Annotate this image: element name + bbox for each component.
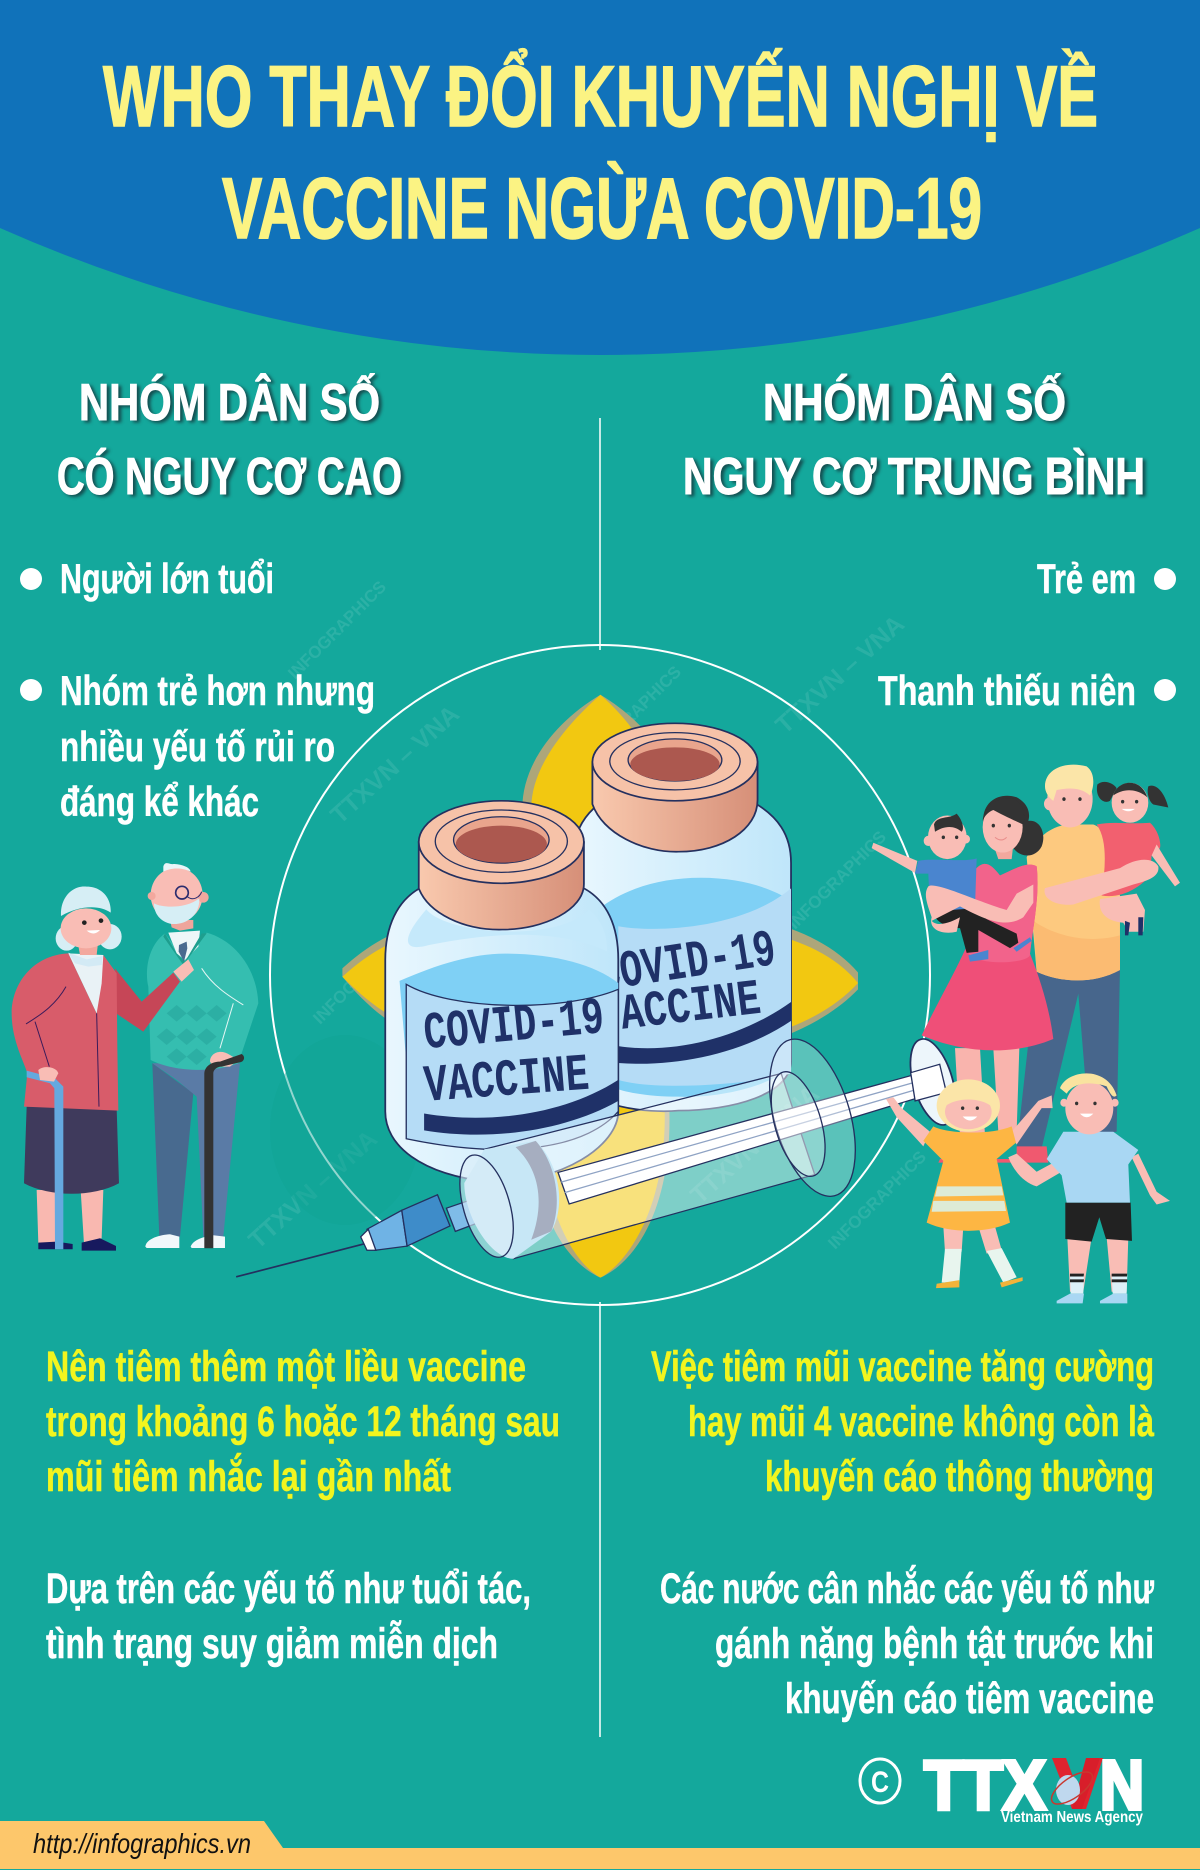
- title: [103, 49, 1098, 257]
- baby held by mother: [872, 814, 1032, 962]
- front vial: [385, 801, 618, 1182]
- plunger disc: [902, 1034, 964, 1129]
- recommendation: high risk: mũi tiêm nhắc lại gần nhất: [46, 1452, 451, 1501]
- needle hub: [361, 1195, 478, 1250]
- father's arm: [1045, 860, 1158, 905]
- back vial: [574, 723, 791, 1111]
- title banner: [0, 0, 1200, 355]
- illustration: children: [886, 1073, 1170, 1303]
- logo: TTXVN: Vietnam News Agency: [1001, 1809, 1143, 1826]
- source url: http://infographics.vn: [33, 1828, 251, 1859]
- heading: high risk group: CÓ NGUY CƠ CAO: [57, 448, 402, 506]
- list: high risk groups: Nhóm trẻ hơn nhưng: [60, 667, 375, 714]
- old man's cane: [204, 1054, 244, 1248]
- central circle: [270, 645, 930, 1305]
- list: high risk groups: Người lớn tuổi: [60, 555, 274, 602]
- old woman's hand: [38, 1067, 58, 1082]
- list: high risk groups: nhiều yếu tố rủi ro: [60, 723, 335, 770]
- heading: high risk group: NHÓM DÂN SỐ: [79, 373, 380, 432]
- watermarks: [243, 577, 930, 1254]
- recommendation: high risk: [46, 1343, 560, 1501]
- list: medium risk groups: [878, 555, 1176, 714]
- little girl: [886, 1079, 1053, 1288]
- little boy: [1008, 1073, 1170, 1303]
- watermarks: INFOGRAPHICS: [284, 577, 390, 683]
- illustration: syringe: [236, 1030, 964, 1277]
- logo: TTXVN: N: [1100, 1746, 1144, 1824]
- logo: TTXVN: C: [871, 1766, 889, 1799]
- logo: TTXVN: [860, 1746, 1144, 1826]
- plunger rod: [558, 1070, 940, 1204]
- old woman's cane: [27, 1071, 63, 1249]
- note: high risk: tình trạng suy giảm miễn dịch: [46, 1619, 498, 1668]
- footer band: [0, 1821, 1200, 1869]
- front vial: COVID-19: [421, 990, 607, 1065]
- heading: medium risk group: NHÓM DÂN SỐ: [763, 373, 1066, 432]
- mother: [922, 796, 1053, 1135]
- recommendation: medium risk: [651, 1343, 1155, 1501]
- father: [938, 765, 1120, 1163]
- list: medium risk groups: Trẻ em: [1037, 555, 1136, 602]
- illustration: family: [872, 765, 1180, 1163]
- watermarks: TTXVN – VNA: [685, 1080, 825, 1209]
- watermarks: TTXVN – VNA: [770, 610, 910, 739]
- girl held by father: [1097, 782, 1180, 935]
- mother's arm: [926, 885, 1033, 933]
- logo: TTXVN: TTX: [924, 1746, 1046, 1824]
- barrel: [484, 1074, 815, 1259]
- barrel left section: [464, 1141, 559, 1259]
- list: high risk groups: đáng kể khác: [60, 778, 259, 825]
- central divider: [599, 418, 601, 1737]
- recommendation: high risk: Nên tiêm thêm một liều vaccine: [46, 1343, 526, 1391]
- back vial: COVID-19: [593, 922, 780, 1007]
- recommendation: high risk: trong khoảng 6 hoặc 12 tháng sau: [46, 1398, 560, 1446]
- watermarks: INFOGRAPHICS: [824, 1147, 930, 1253]
- back vial: VACCINE: [594, 971, 764, 1047]
- soft background blob: [270, 1035, 420, 1225]
- note: medium risk: [660, 1564, 1155, 1723]
- old woman: [12, 887, 194, 1251]
- note: high risk: Dựa trên các yếu tố như tuổi tác,: [46, 1565, 531, 1613]
- illustration: elderly couple: [12, 863, 258, 1251]
- finger flange: [754, 1030, 871, 1205]
- heading: medium risk group: [683, 373, 1145, 506]
- illustration: vaccine vials: [342, 695, 858, 1278]
- heading: high risk group: [57, 373, 402, 506]
- watermarks: TTXVN – VNA: [243, 1125, 383, 1254]
- watermarks: TTXVN – VNA: [325, 700, 465, 829]
- needle: [236, 1244, 364, 1277]
- old man: [145, 863, 258, 1248]
- watermarks: INFOGRAPHICS: [784, 827, 890, 933]
- flower petals: [342, 695, 858, 1278]
- watermarks: INFOGRAPHICS: [309, 922, 415, 1028]
- list: high risk groups: [20, 555, 375, 825]
- note: high risk: [46, 1565, 531, 1668]
- barrel left cap: [450, 1150, 523, 1263]
- watermarks: INFOGRAPHICS: [579, 662, 685, 768]
- grey ring: [516, 1141, 557, 1240]
- front vial: VACCINE: [422, 1047, 591, 1118]
